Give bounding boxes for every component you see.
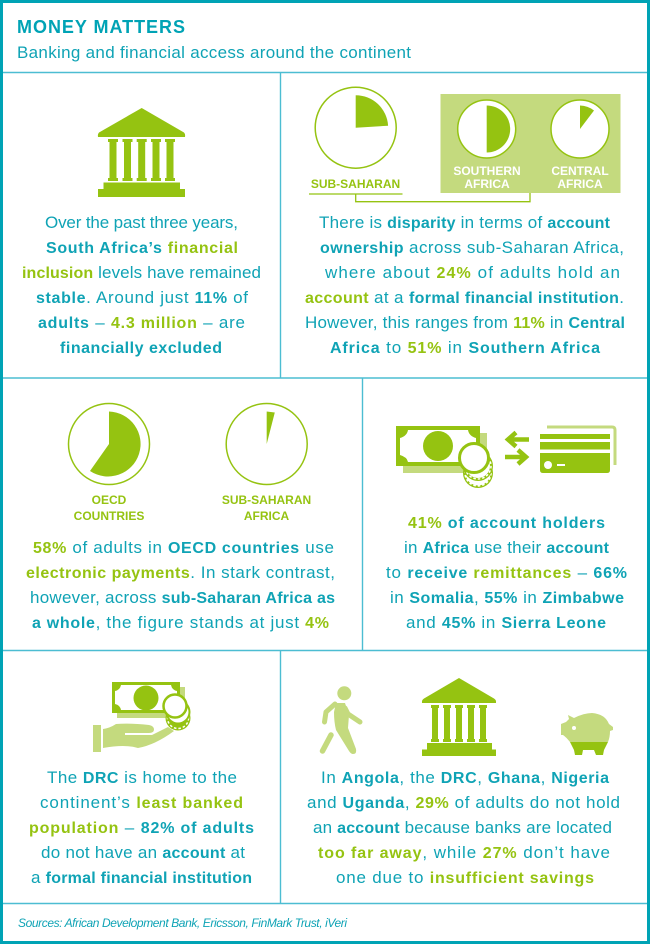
- text: disparity: However, this ranges from 11% in Central: [305, 313, 625, 332]
- connector: [309, 193, 530, 202]
- text: distance: In Angola, the DRC, Ghana, Nigeria: [321, 768, 609, 787]
- text: remittances: in Africa use their account: [404, 538, 610, 557]
- text: electronic payments: electronic payments. In stark contrast,: [26, 563, 335, 582]
- text: South Africa: financially excluded: [60, 340, 222, 357]
- labels: AFRICA: [244, 509, 289, 523]
- text: South Africa: adults – 4.3 million – are: [38, 313, 245, 332]
- text: electronic payments: 58% of adults in OECD countries use: [33, 538, 334, 557]
- text: DRC: a formal financial institution: [31, 868, 252, 887]
- pie: Southern Africa 51%: [458, 100, 516, 158]
- text: disparity: [305, 213, 625, 357]
- text: South Africa: Over the past three years,: [45, 213, 238, 232]
- label: sub-Saharan: SUB-SAHARAN: [311, 177, 400, 191]
- panel: account ownership disparity: [305, 87, 625, 357]
- labels: [453, 164, 609, 191]
- text: disparity: where about 24% of adults hold an: [324, 263, 620, 282]
- text: distance: too far away, while 27% don’t have: [318, 843, 610, 862]
- pie: Central Africa 11%: [551, 100, 609, 158]
- panel: remittances: [386, 426, 627, 632]
- icon: hand with cash: [93, 682, 190, 752]
- text: DRC: The DRC is home to the: [47, 768, 237, 787]
- icon: cash and coins: [396, 426, 493, 488]
- text: South Africa: [22, 213, 261, 357]
- text: distance: [307, 768, 620, 887]
- title: MONEY MATTERS: [17, 17, 185, 37]
- labels: COUNTRIES: [74, 509, 144, 523]
- text: South Africa: stable. Around just 11% of: [36, 288, 248, 307]
- text: electronic payments: however, across sub-Saharan Africa as: [30, 588, 335, 607]
- pie: sub-Saharan 4%: [226, 404, 307, 484]
- text: disparity: account at a formal financial institution.: [305, 288, 624, 307]
- labels: SUB-SAHARAN: [222, 493, 311, 507]
- text: DRC: continent’s least banked: [40, 793, 243, 812]
- text: electronic payments: [26, 538, 335, 632]
- text: remittances: and 45% in Sierra Leone: [406, 613, 606, 632]
- labels: OECD: [92, 493, 127, 507]
- pie: sub-Saharan 24%: [315, 87, 396, 168]
- labels: CENTRAL: [551, 164, 609, 178]
- sources: Sources: African Development Bank, Ericsson, FinMark Trust, iVeri: [18, 916, 347, 930]
- icon: bank: [422, 678, 496, 756]
- labels: AFRICA: [557, 177, 603, 191]
- text: remittances: to receive remittances – 66%: [386, 563, 627, 582]
- panel: distance and savings: [307, 678, 620, 887]
- text: disparity: ownership across sub-Saharan Africa,: [320, 238, 624, 257]
- text: distance: an account because banks are located: [313, 818, 612, 837]
- text: South Africa: inclusion levels have remained: [22, 263, 261, 282]
- text: disparity: Africa to 51% in Southern Africa: [330, 338, 600, 357]
- icon: bank: [98, 108, 185, 197]
- labels: SOUTHERN: [453, 164, 521, 178]
- panel: electronic payments: [26, 404, 335, 632]
- text: remittances: in Somalia, 55% in Zimbabwe: [390, 588, 624, 607]
- icon: exchange arrows: [505, 432, 529, 464]
- text: DRC: [29, 768, 254, 887]
- text: DRC: do not have an account at: [41, 843, 245, 862]
- icon: bank card: [540, 427, 615, 473]
- text: electronic payments: a whole, the figure stands at just 4%: [32, 613, 329, 632]
- panel: South Africa financial inclusion: [22, 108, 261, 357]
- icon: piggy bank: [561, 713, 613, 755]
- regional box: [440, 94, 620, 193]
- icon: walking person: [322, 686, 360, 754]
- labels: [74, 493, 311, 523]
- text: remittances: [386, 515, 627, 632]
- text: remittances: 41% of account holders: [408, 515, 605, 532]
- pie: OECD 58%: [68, 404, 150, 484]
- header: [17, 17, 411, 62]
- text: distance: one due to insufficient savings: [336, 868, 594, 887]
- text: disparity: There is disparity in terms of account: [319, 213, 611, 232]
- text: South Africa: South Africa’s financial: [46, 240, 238, 257]
- labels: AFRICA: [464, 177, 510, 191]
- text: distance: and Uganda, 29% of adults do not hold: [307, 793, 620, 812]
- panel: least banked: [29, 682, 254, 887]
- subtitle: Banking and financial access around the continent: [17, 43, 411, 62]
- text: DRC: population – 82% of adults: [29, 818, 254, 837]
